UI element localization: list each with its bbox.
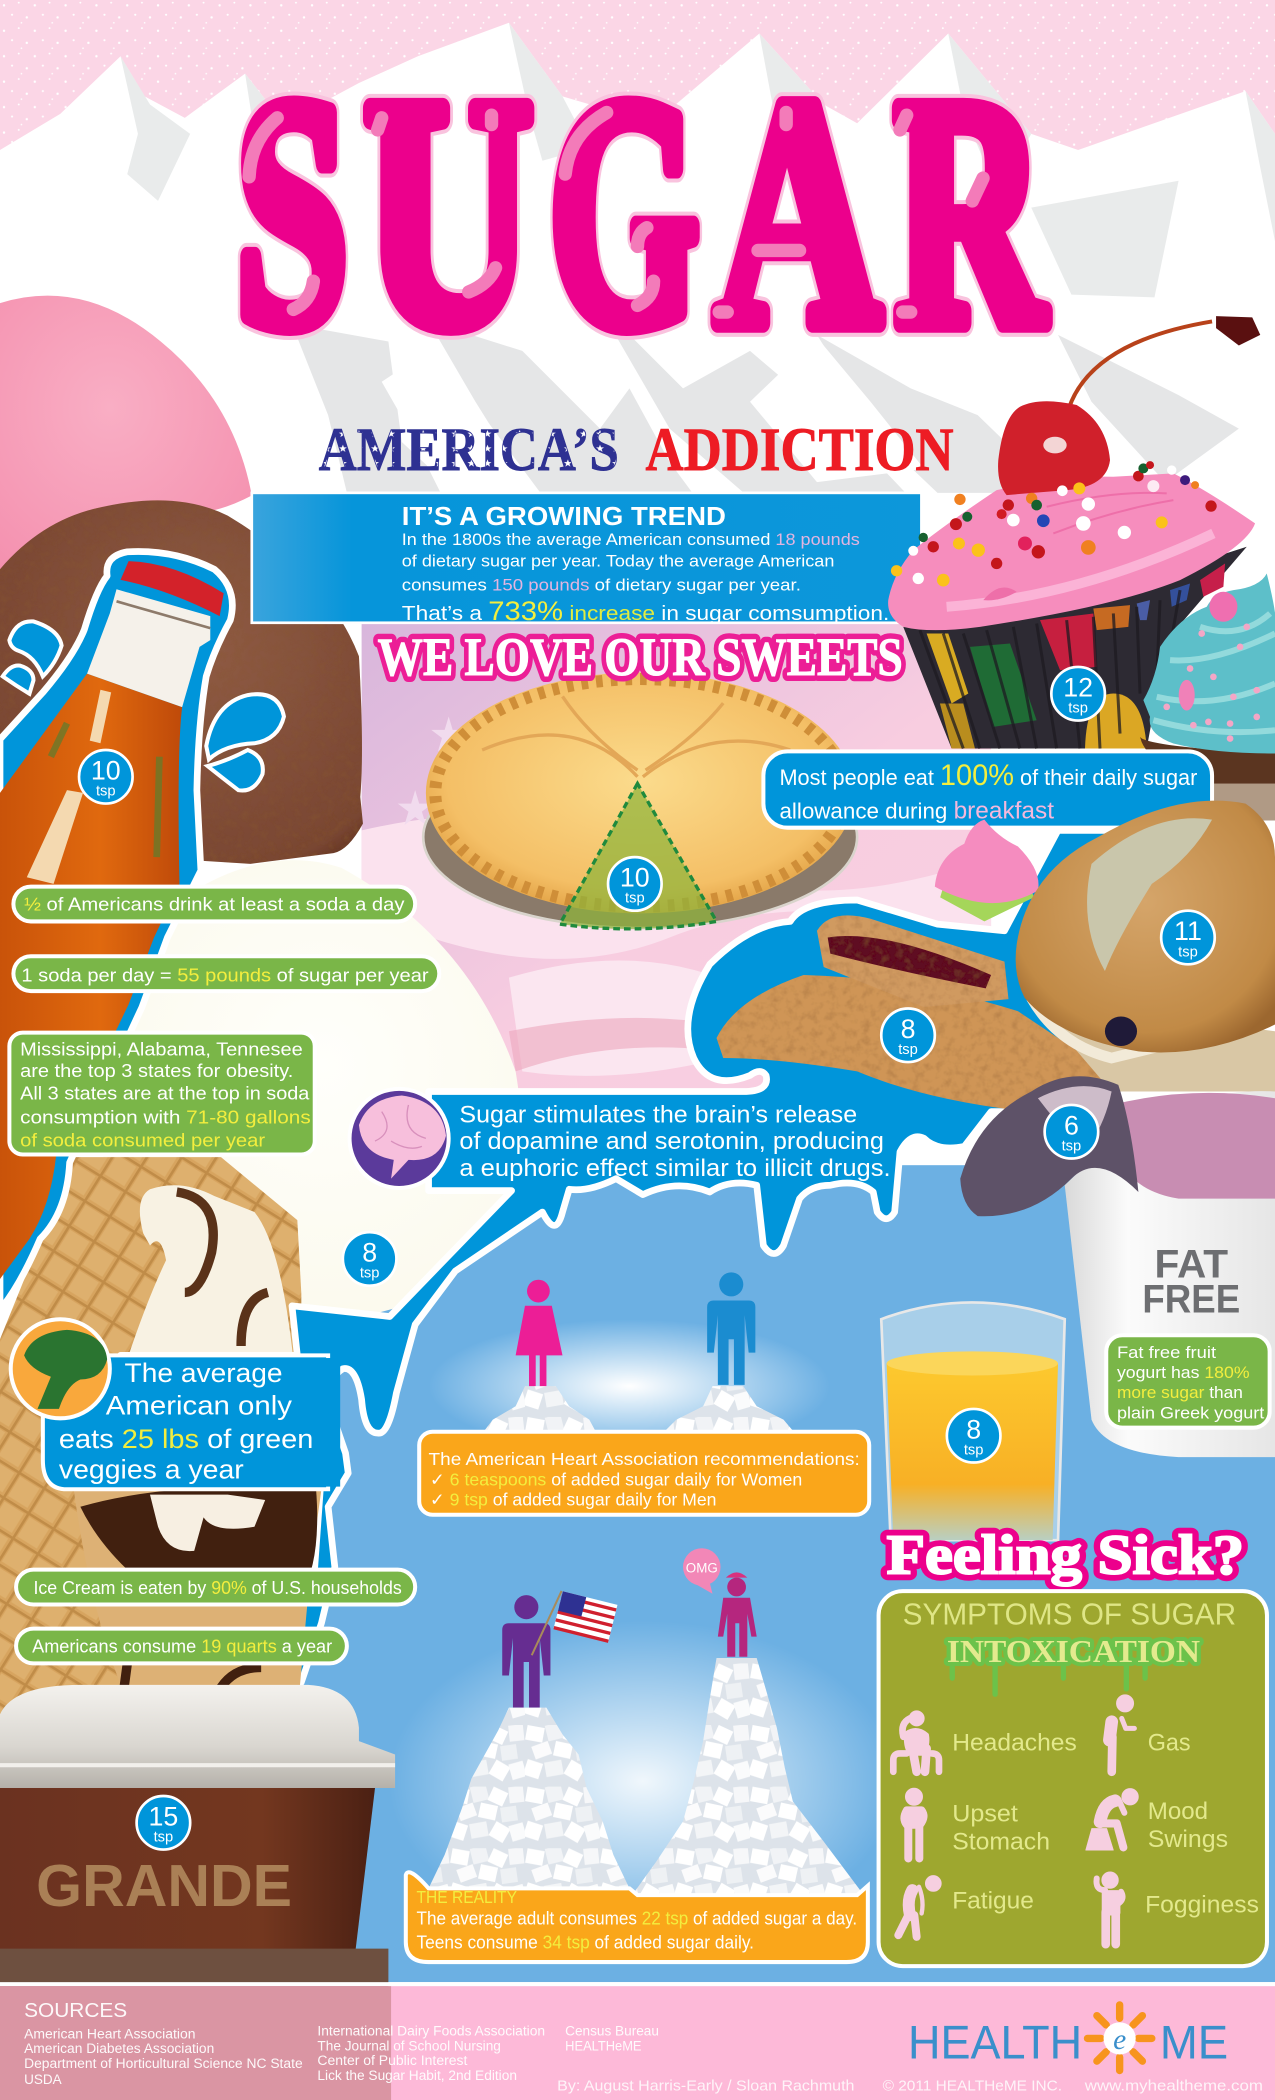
teaspoon badges: 10 bbox=[620, 863, 650, 893]
callout: fat free yogurt: plain Greek yogurt bbox=[1117, 1403, 1265, 1422]
text: 1800s consumption: In the 1800s the average American consumed 18 pounds bbox=[402, 530, 860, 549]
cereal bars bbox=[717, 915, 1118, 1114]
title: SUGAR: R bbox=[895, 31, 1047, 394]
panel: american heart association: ✓ 6 teaspoons of added sugar daily for Women bbox=[430, 1469, 802, 1489]
icon: fatigue bbox=[898, 1876, 941, 1937]
panel: symptoms of sugar intoxication bbox=[879, 1591, 1267, 1966]
left splash bbox=[3, 621, 62, 694]
symptom labels: Fatigue bbox=[952, 1887, 1034, 1914]
teaspoon badges: tsp bbox=[1178, 944, 1198, 960]
pie bbox=[423, 672, 857, 929]
fact: half of americans bbox=[13, 887, 415, 921]
sources: International Dairy Foods Association bbox=[317, 2024, 545, 2039]
logo: healtheme: ME bbox=[1160, 2016, 1228, 2068]
fact: top three states: are the top 3 states for obesity. bbox=[20, 1060, 293, 1081]
coffee cup bbox=[0, 1685, 395, 1996]
text: 1800s consumption bbox=[402, 530, 860, 595]
flag background panel bbox=[362, 623, 991, 1105]
pie slice bbox=[560, 783, 717, 929]
blue syrup stream behind text bbox=[121, 830, 1112, 1682]
title: SUGAR: G bbox=[549, 31, 699, 394]
icon: upset stomach bbox=[904, 1788, 924, 1858]
symptom labels: Swings bbox=[1148, 1826, 1228, 1853]
symptom labels: Upset bbox=[952, 1800, 1018, 1827]
credits: By: August Harris-Early / Sloan Rachmuth bbox=[557, 2079, 854, 2095]
panel: growing trend bbox=[252, 493, 921, 626]
teaspoon badges: tsp bbox=[964, 1442, 983, 1458]
fat free label: FREE bbox=[1142, 1276, 1240, 1321]
teaspoon badges: 12 bbox=[1063, 672, 1093, 702]
symptom labels: Fogginess bbox=[1145, 1891, 1259, 1918]
heading: we love our sweets: WE LOVE OUR SWEETS bbox=[378, 627, 903, 687]
text: 733 percent increase: That’s a 733% increase in sugar comsumption. bbox=[402, 596, 889, 626]
symptom labels: Mood bbox=[1148, 1798, 1208, 1825]
panel: the reality: Teens consume 34 tsp of added sugar daily. bbox=[417, 1933, 754, 1953]
sources: Lick the Sugar Habit, 2nd Edition bbox=[317, 2068, 517, 2083]
title: SUGAR: G bbox=[549, 31, 699, 394]
title: SUGAR: S bbox=[236, 31, 348, 394]
callout: fat free yogurt: yogurt has 180% bbox=[1117, 1363, 1250, 1382]
icon: fogginess bbox=[1096, 1872, 1123, 1944]
fact: half of americans: ½ of Americans drink at least a soda a day bbox=[24, 894, 405, 915]
callout: breakfast bbox=[763, 751, 1212, 828]
icon: gas bbox=[1109, 1695, 1134, 1772]
teaspoon badges: tsp bbox=[1062, 1138, 1081, 1154]
fact: ice cream households bbox=[16, 1570, 415, 1604]
grande label: GRANDE bbox=[36, 1854, 292, 1919]
teaspoon badges: 8 bbox=[901, 1014, 915, 1044]
icon: mood swings bbox=[1086, 1789, 1138, 1850]
right splash bbox=[206, 694, 284, 791]
sources: Department of Horticultural Science NC State bbox=[24, 2056, 303, 2071]
panel: american heart association: The American Heart Association recommendations: bbox=[429, 1449, 860, 1469]
credits bbox=[557, 2079, 1263, 2095]
teaspoon badges: 10 bbox=[91, 755, 121, 785]
heading: intoxication: INTOXICATION bbox=[947, 1633, 1200, 1669]
teaspoon badges: 8 bbox=[966, 1414, 981, 1444]
sugar cubes bbox=[479, 1386, 798, 1437]
teaspoon badges: 11 bbox=[1174, 916, 1202, 946]
orange juice glass bbox=[881, 1302, 1065, 1540]
credits: © 2011 HEALTHeME INC. bbox=[883, 2079, 1062, 2095]
fact: ice cream households: Ice Cream is eaten by 90% of U.S. households bbox=[33, 1577, 402, 1598]
left sugar mountain bbox=[429, 1708, 629, 1888]
teaspoon badges: 8 bbox=[362, 1238, 377, 1268]
teaspoon badges bbox=[79, 667, 1215, 1850]
cupcake with cherry bbox=[888, 316, 1260, 749]
title: SUGAR: U bbox=[364, 31, 533, 394]
symptom labels: Gas bbox=[1148, 1729, 1191, 1756]
fat free label: FAT bbox=[1154, 1242, 1229, 1287]
title: SUGAR: R bbox=[895, 31, 1047, 394]
teaspoon badges: tsp bbox=[154, 1830, 173, 1846]
fact: one soda per day bbox=[13, 956, 439, 991]
heading: it's a growing trend: IT’S A GROWING TREND bbox=[402, 503, 726, 531]
fact: top three states: of soda consumed per year bbox=[20, 1129, 265, 1150]
yogurt cup bbox=[960, 1076, 1275, 1457]
title: SUGAR: U bbox=[364, 31, 533, 394]
veggies callout: The average bbox=[125, 1358, 283, 1388]
teaspoon badges: tsp bbox=[96, 784, 116, 800]
logo: healtheme bbox=[908, 2005, 1228, 2071]
heading: intoxication bbox=[947, 1633, 1200, 1694]
heading: intoxication: INTOXICATION bbox=[947, 1633, 1200, 1669]
text: dopamine callout: Sugar stimulates the brain’s release bbox=[459, 1101, 857, 1128]
veggies callout: American only bbox=[106, 1390, 293, 1420]
callout: fat free yogurt bbox=[1106, 1335, 1270, 1428]
panel: the reality: The average adult consumes 22 tsp of added sugar a day. bbox=[417, 1909, 857, 1929]
callout: breakfast: Most people eat 100% of their daily sugar bbox=[779, 759, 1197, 792]
vanilla ice cream scoop bbox=[80, 860, 522, 1316]
icon: american flag bbox=[532, 1588, 617, 1672]
sources: HEALTHeME bbox=[565, 2038, 642, 2053]
fact: top three states bbox=[9, 1033, 315, 1154]
title: SUGAR: S bbox=[236, 31, 348, 394]
sources: USDA bbox=[24, 2072, 62, 2087]
fact: top three states: All 3 states are at the top in soda bbox=[20, 1083, 310, 1104]
pink ice cream scoop bbox=[0, 296, 252, 576]
symptom labels: Stomach bbox=[952, 1829, 1050, 1856]
text: 1800s consumption: consumes 150 pounds of dietary sugar per year. bbox=[402, 576, 801, 595]
teal frosted cupcake bbox=[1140, 573, 1275, 820]
teaspoon badges: tsp bbox=[898, 1042, 918, 1058]
right sugar mountain bbox=[632, 1658, 864, 1895]
magenta figure and OMG bubble on sugar mountain bbox=[632, 1548, 864, 1895]
teaspoon badges: 6 bbox=[1064, 1110, 1079, 1140]
sources: SOURCES bbox=[24, 2000, 127, 2022]
footer bbox=[0, 1982, 1275, 2100]
fact: one soda per day: 1 soda per day = 55 pounds of sugar per year bbox=[21, 965, 429, 986]
panel: american heart association bbox=[419, 1432, 869, 1515]
heading: feeling sick: Feeling Sick? bbox=[887, 1525, 1244, 1587]
small pink cupcake icon bbox=[935, 820, 1039, 921]
title: SUGAR: A bbox=[715, 31, 881, 394]
callout: breakfast: allowance during breakfast bbox=[779, 797, 1054, 824]
man figure bbox=[707, 1272, 755, 1385]
sources: Center of Public Interest bbox=[317, 2053, 468, 2068]
symptom labels: Headaches bbox=[952, 1729, 1077, 1756]
veggies callout: eats 25 lbs of green bbox=[59, 1424, 313, 1454]
fact: top three states: Mississippi, Alabama, Tennesee bbox=[20, 1038, 303, 1059]
sugar pile glow bbox=[388, 1621, 897, 1942]
women and men figures with sugar cubes bbox=[429, 1272, 830, 1453]
text: dopamine callout: a euphoric effect similar to illicit drugs. bbox=[459, 1155, 891, 1182]
symptom icons bbox=[893, 1695, 1138, 1944]
panel: american heart association: ✓ 9 tsp of added sugar daily for Men bbox=[430, 1489, 717, 1509]
yogurt foil lid bbox=[960, 1076, 1138, 1216]
heading: america's addiction: AMERICA’S bbox=[319, 416, 619, 484]
logo: healtheme: HEALTH bbox=[908, 2016, 1082, 2068]
OMG speech bubble bbox=[683, 1548, 721, 1594]
fact: quarts per year bbox=[16, 1629, 347, 1663]
title: SUGAR: A bbox=[715, 31, 881, 394]
veggies callout: veggies a year bbox=[59, 1455, 244, 1485]
sources: Census Bureau bbox=[565, 2024, 659, 2039]
waffle cone with ice cream bbox=[0, 1157, 301, 1714]
purple figure with flag on sugar mountain bbox=[429, 1588, 629, 1888]
logo: healtheme: e bbox=[1113, 2024, 1126, 2056]
callout: fat free yogurt: more sugar than bbox=[1117, 1383, 1243, 1402]
sources: The Journal of School Nursing bbox=[317, 2038, 501, 2053]
soda bottle bbox=[0, 551, 232, 1310]
muffin bbox=[1016, 801, 1275, 1092]
fact: quarts per year: Americans consume 19 quarts a year bbox=[32, 1636, 332, 1657]
title: SUGAR bbox=[236, 31, 1047, 394]
sources bbox=[24, 2000, 659, 2087]
heading: america's addiction: ADDICTION bbox=[646, 416, 954, 484]
chocolate ice cream scoop bbox=[0, 500, 363, 864]
heading: feeling sick: Feeling Sick? bbox=[887, 1525, 1244, 1587]
woman figure bbox=[516, 1280, 562, 1390]
icon: headaches bbox=[893, 1711, 939, 1772]
symptom labels bbox=[952, 1729, 1259, 1918]
credits: www.myhealtheme.com bbox=[1084, 2079, 1263, 2095]
teaspoon badges: 15 bbox=[149, 1801, 178, 1831]
brain icon bbox=[350, 1089, 449, 1188]
heading: symptoms of sugar: SYMPTOMS OF SUGAR bbox=[903, 1597, 1236, 1632]
text: dopamine callout: of dopamine and serotonin, producing bbox=[459, 1128, 884, 1155]
teaspoon badges: tsp bbox=[360, 1266, 379, 1282]
sources: American Heart Association bbox=[24, 2026, 196, 2041]
text: 1800s consumption: of dietary sugar per year. Today the average American bbox=[402, 552, 834, 571]
panel: the reality bbox=[406, 1872, 868, 1962]
teaspoon badges: tsp bbox=[1068, 700, 1088, 716]
teaspoon badges: tsp bbox=[625, 891, 645, 907]
lower light-blue panel bbox=[301, 1165, 1275, 1982]
fact: top three states: consumption with 71-80 gallons bbox=[20, 1107, 311, 1128]
fat free label bbox=[1142, 1242, 1240, 1322]
sources: American Diabetes Association bbox=[24, 2041, 214, 2056]
heading: america's addiction bbox=[319, 416, 954, 484]
OMG speech bubble: OMG bbox=[686, 1560, 718, 1575]
text: dopamine callout bbox=[459, 1101, 891, 1182]
heading: we love our sweets: WE LOVE OUR SWEETS bbox=[378, 627, 903, 687]
panel: the reality: THE REALITY bbox=[417, 1887, 517, 1907]
callout: fat free yogurt: Fat free fruit bbox=[1117, 1343, 1216, 1362]
lower ice cream with chocolate fudge bbox=[74, 1487, 321, 1714]
veggies callout bbox=[11, 1319, 340, 1489]
icon: broccoli bbox=[11, 1319, 110, 1418]
